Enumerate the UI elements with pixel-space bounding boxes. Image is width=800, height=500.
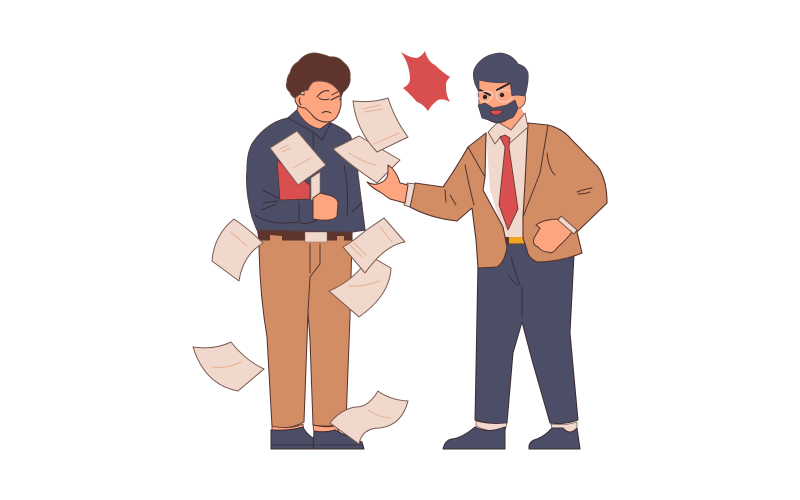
employee neck and face: [295, 76, 341, 129]
boss head: [477, 78, 525, 123]
boss shirt: [486, 123, 528, 238]
boss shirt cuff right: [558, 216, 577, 234]
employee trousers: [259, 238, 352, 428]
employee belt: [257, 227, 352, 242]
paper: upper right of waist: [343, 218, 405, 273]
boss trousers: [475, 240, 578, 424]
paper: at feet: [330, 391, 408, 444]
red folder: [277, 160, 310, 200]
employee shoes: [271, 427, 364, 449]
employee fist: [313, 193, 338, 220]
employee figure: [247, 53, 365, 449]
boss figure: [404, 53, 607, 449]
employee ankles: [272, 424, 340, 433]
folder paper edge: [311, 172, 320, 200]
boss jacket: [410, 123, 607, 268]
paper: on shirt: [270, 131, 326, 185]
icon: red anger burst: [401, 51, 450, 111]
paper: left of waist: [212, 219, 263, 281]
paper: lower left: [193, 342, 264, 391]
boss neck: [498, 105, 527, 137]
employee shirt: [247, 110, 365, 232]
boss shirt cuff left: [404, 183, 415, 207]
boss reaching hand: [367, 165, 408, 203]
boss hair: [473, 53, 528, 96]
paper: held by boss: [333, 136, 400, 183]
boss hand on hip: [534, 219, 573, 253]
boss shoes: [443, 427, 580, 449]
red tie: [499, 135, 518, 230]
boss ankles: [476, 421, 577, 434]
belt buckle: [505, 237, 525, 244]
paper: lower right of waist: [329, 256, 391, 317]
paper: upper: [353, 98, 408, 152]
flying papers: [193, 98, 408, 444]
boss collar: [488, 113, 528, 144]
employee curly hair: [286, 53, 350, 100]
